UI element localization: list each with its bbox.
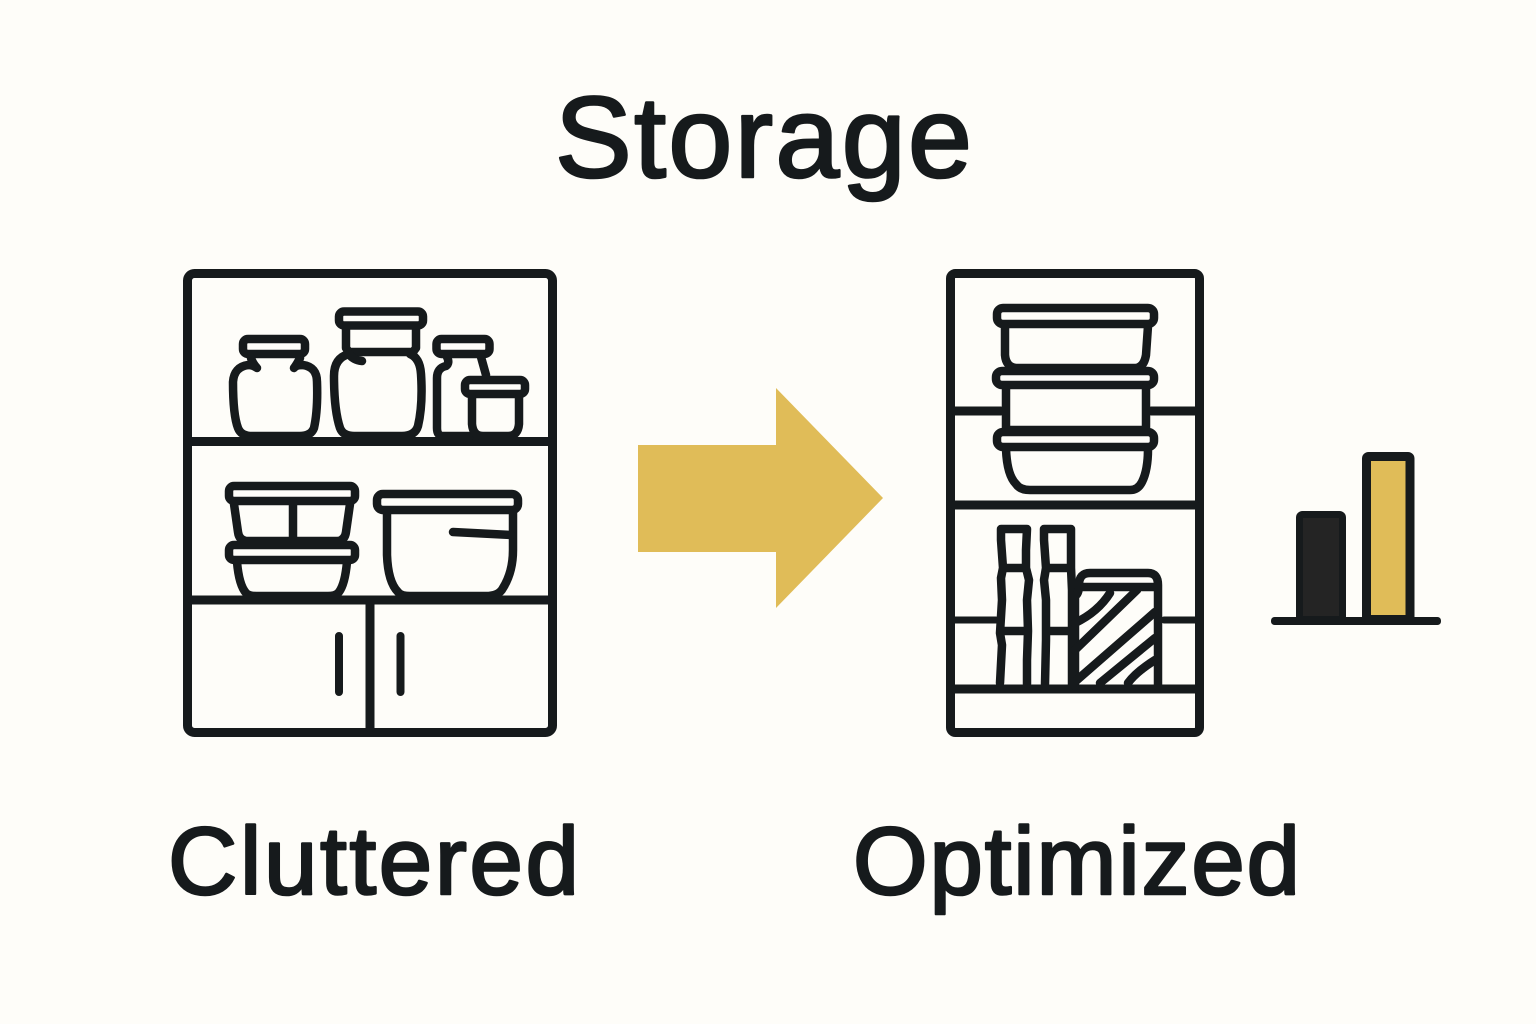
dark bar (1300, 514, 1342, 620)
stacked box 2 (996, 371, 1154, 430)
jar 3 (436, 339, 490, 436)
panel: optimized cabinet (950, 274, 1200, 732)
chart baseline (1271, 617, 1441, 625)
title: Storage (555, 74, 972, 202)
arrow (638, 388, 883, 608)
shelf behind books (955, 616, 1195, 624)
panel: cluttered cabinet (188, 274, 552, 732)
bar chart (1271, 456, 1441, 625)
large pot (377, 494, 518, 596)
cabinet frame (950, 274, 1200, 732)
books (1000, 529, 1072, 686)
stacked box 1 (997, 308, 1154, 368)
jar 1 (233, 339, 317, 436)
stacked containers (229, 486, 355, 596)
jar 2 (334, 312, 423, 436)
stacked box 3 (997, 432, 1154, 490)
small jar (465, 380, 525, 436)
cabinet door handles (339, 636, 400, 692)
label: cluttered: Cluttered (168, 808, 579, 915)
label: optimized: Optimized (853, 808, 1300, 915)
hatched box (1075, 573, 1158, 686)
cabinet frame (188, 274, 552, 732)
yellow bar (1366, 456, 1410, 620)
